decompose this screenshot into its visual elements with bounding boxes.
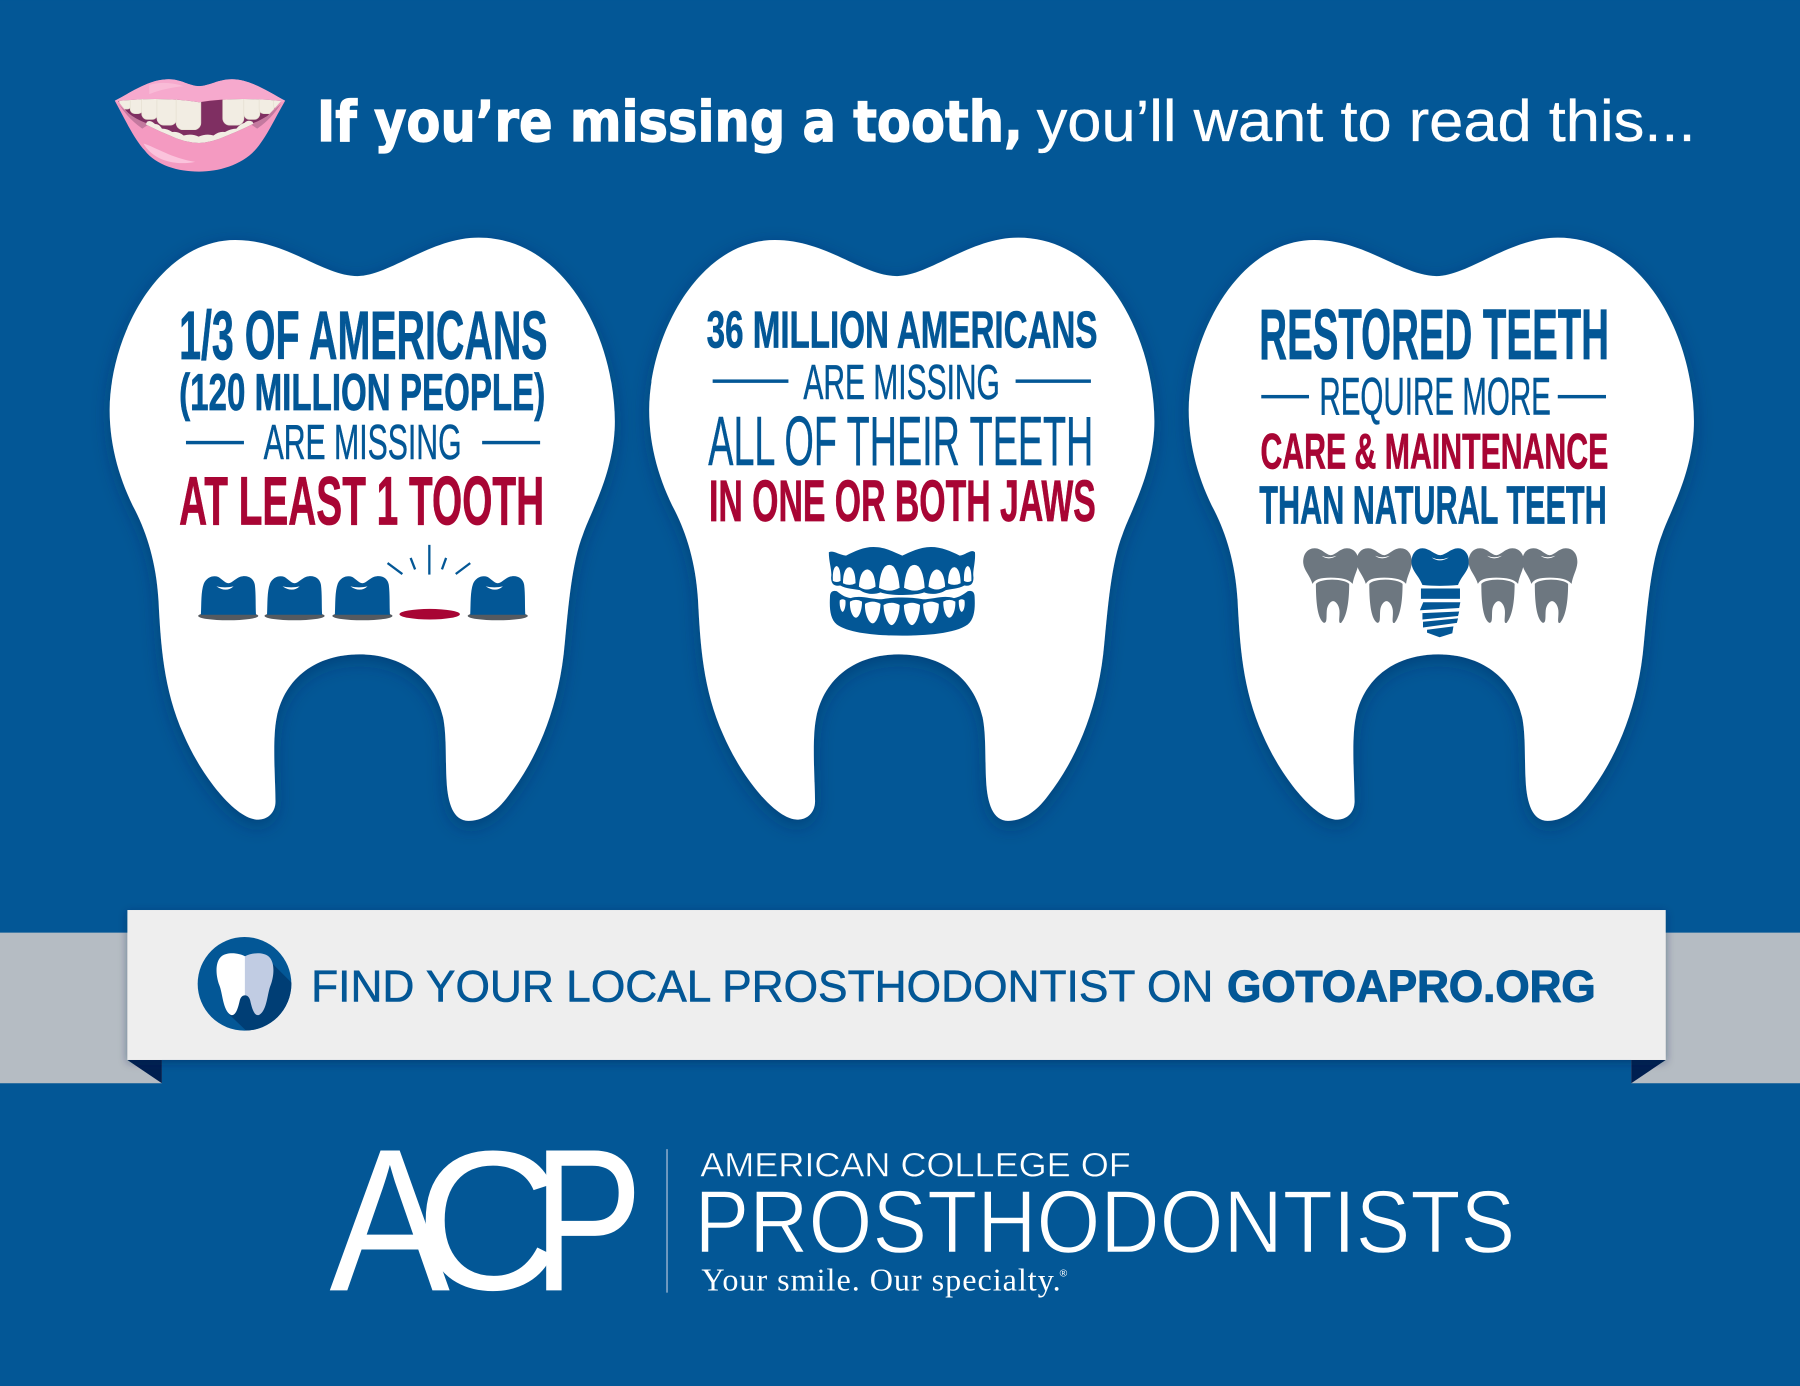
panel: 36 million Americans: IN ONE OR BOTH JAWS xyxy=(709,469,1096,534)
panel: 36 million Americans: ALL OF THEIR TEETH xyxy=(708,402,1093,480)
panel: 36 million Americans xyxy=(649,238,1154,821)
panel: 36 million Americans: 36 MILLION AMERICANS xyxy=(707,300,1097,358)
panel: restored teeth xyxy=(1189,238,1694,821)
icon: mouth with missing tooth xyxy=(115,79,285,172)
logo: ACP monogram: C xyxy=(416,1110,560,1332)
icon: tooth in circle xyxy=(198,937,292,1031)
panel: one third of Americans: ARE MISSING xyxy=(264,416,462,470)
icon: dentures xyxy=(829,547,975,636)
logo wordmark: Your smile. Our specialty. xyxy=(701,1261,1061,1297)
panel: 36 million Americans: ARE MISSING xyxy=(803,355,1000,410)
logo: ACP monogram: P xyxy=(533,1107,643,1334)
logo wordmark: ® xyxy=(1060,1269,1068,1280)
ribbon band right xyxy=(1631,933,1800,1083)
logo wordmark: AMERICAN COLLEGE OF xyxy=(700,1147,1131,1185)
title xyxy=(317,89,1696,155)
panel: one third of Americans: (120 MILLION PEOPLE) xyxy=(179,363,545,421)
panel: one third of Americans xyxy=(110,238,615,821)
ribbon fold right xyxy=(1631,1060,1666,1083)
title: If you’re missing a tooth, xyxy=(317,90,1023,155)
icon: natural teeth with dental implant xyxy=(1303,548,1577,637)
ribbon fold left xyxy=(127,1060,162,1083)
title: you’ll want to read this... xyxy=(1037,89,1696,154)
logo wordmark: PROSTHODONTISTS xyxy=(695,1171,1515,1271)
logo: ACP monogram xyxy=(329,1107,643,1334)
logo wordmark xyxy=(695,1147,1515,1297)
logo divider xyxy=(666,1149,668,1293)
banner xyxy=(127,910,1666,1060)
panel: one third of Americans: AT LEAST 1 TOOTH xyxy=(179,464,544,540)
panel: restored teeth: REQUIRE MORE xyxy=(1319,367,1551,426)
banner text: FIND YOUR LOCAL PROSTHODONTIST ON xyxy=(311,962,1213,1012)
icon: row of teeth with one missing xyxy=(198,545,528,620)
panel: one third of Americans: 1/3 OF AMERICANS xyxy=(179,298,548,374)
logo: ACP monogram: A xyxy=(329,1107,450,1334)
banner text: GOTOAPRO.ORG xyxy=(1227,962,1596,1012)
ribbon band left xyxy=(0,933,162,1083)
